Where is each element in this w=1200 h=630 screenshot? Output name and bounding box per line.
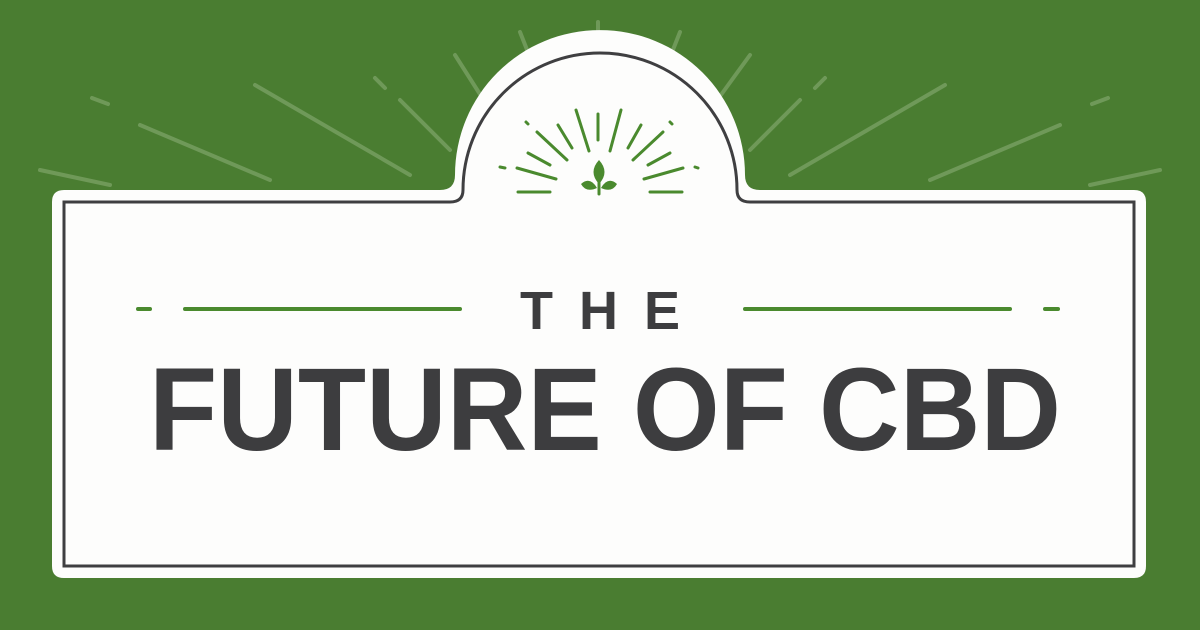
background rays [40,22,1160,185]
decorative green rules [138,307,1058,311]
heading: THE: THE [520,281,680,341]
sign panel [52,30,1146,578]
heading: FUTURE OF CBD: FUTURE OF CBD [149,344,1061,476]
icon: sunburst with sprout [500,110,698,194]
icon: sprout leaves [581,160,617,190]
